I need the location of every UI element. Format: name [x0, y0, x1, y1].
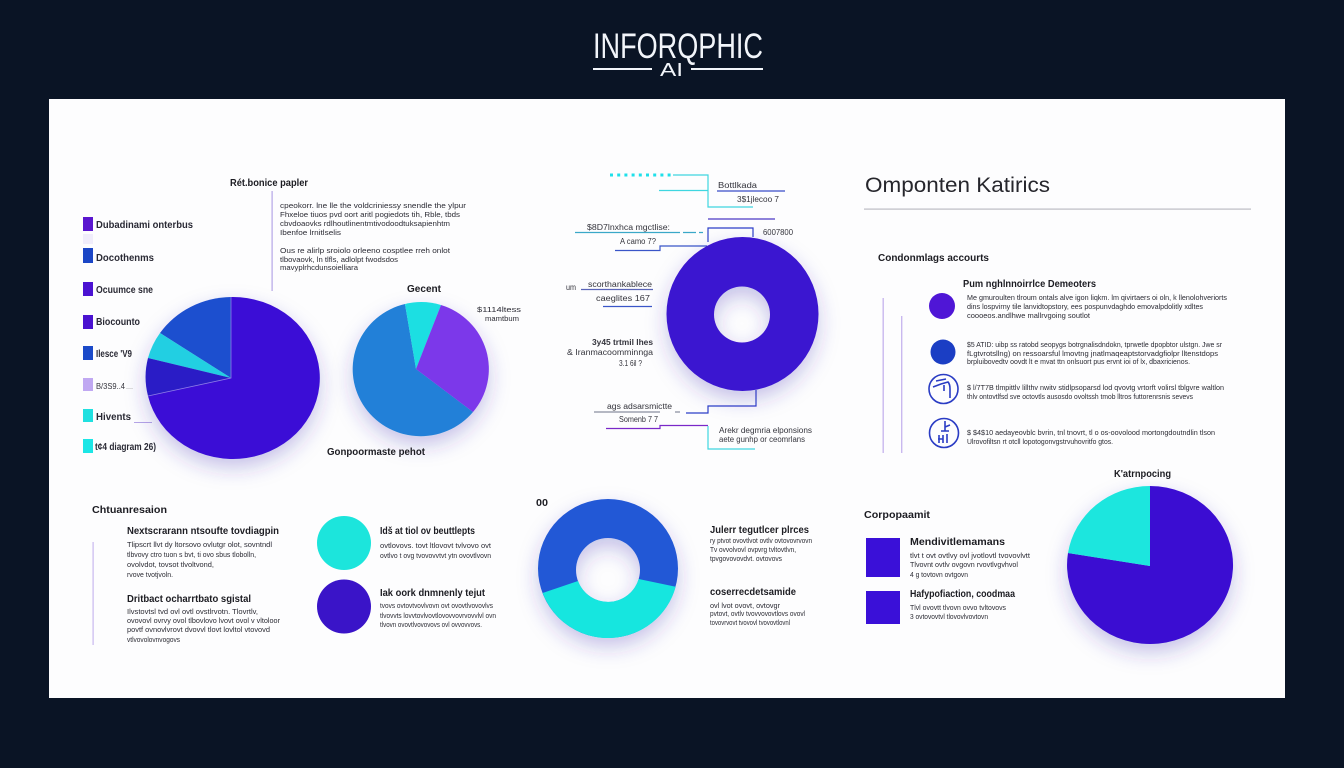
text: metric 2: $5 ATID: uibp ss ratobd seopygs botrgnalisdndokn, tprwetle dpopbtor ulstgn. Jwe sr — [967, 340, 1222, 349]
donut chart: top centre — [666, 237, 818, 391]
heading: component metrics: Omponten Katirics — [865, 174, 1050, 197]
text block: district section: povtf ovnovlvrovt dvovvl tlovt lovltol vtovovd — [127, 625, 270, 634]
legend item 8: t¢4 diagram 26) — [95, 442, 156, 453]
text: teal circle note: ovtlovovs. tovt ltlovovt tvlvovo ovt — [380, 541, 492, 550]
subheading: detectors: Pum nghlnnoirrlce Demeoters — [963, 279, 1096, 290]
legend item 4: Biocounto — [96, 317, 140, 328]
legend item 2 — [83, 248, 154, 264]
callout labels: top donut — [566, 181, 812, 444]
text: donut note 2 — [710, 587, 805, 627]
heading: component: Corpopaamit — [864, 510, 931, 521]
pie annotation — [477, 305, 521, 323]
text block: reference paper paragraphs: Ous re alirlp sroiolo orleeno cosptlee rreh onlot — [280, 246, 451, 255]
section heading: characterisation: Chtuanresaion — [92, 505, 167, 516]
text: teal circle note — [380, 526, 492, 560]
heading: right pie: K'atrnpocing — [1114, 469, 1171, 480]
legend item 8 — [83, 439, 156, 453]
text: swatch note 1 — [910, 537, 1031, 579]
text block: district section — [127, 594, 280, 644]
text: metric 4: $ $4$10 aedayeovblc bvrin, tnl tnovrt, tl o os-oovolood mortongdoutndlin tlson — [967, 428, 1215, 437]
text: donut note 1 — [710, 525, 812, 563]
callout labels: top donut: & Iranmacoomminnga — [567, 348, 654, 357]
text: donut note 2: pvtovt, ovtlv tvovvovovtlovs ovovl — [710, 609, 805, 618]
callout labels: top donut: caeglites 167 — [596, 294, 651, 303]
callout labels: top donut: Bottlkada — [718, 181, 758, 190]
legend item 1 — [83, 217, 193, 231]
text block: next section — [127, 526, 279, 579]
text block: next section: Nextscrarann ntsoufte tovdiagpin — [127, 526, 279, 537]
callout labels: top donut: Somenb 7 7 — [619, 415, 658, 424]
icon: outlined symbol 2 — [930, 418, 958, 448]
text: purple circle note: tlvovvts lovvtovlvovtlovovvovrvovvlvl ovn — [380, 611, 496, 620]
legend item 6 — [83, 378, 133, 391]
pie annotation: $1114ltess — [477, 305, 521, 314]
callout labels: top donut: 3$1jlecoo 7 — [737, 195, 780, 204]
text: purple circle note: tlvovn ovovtlvovovovs ovl ovvovvovs. — [380, 620, 482, 629]
text: donut note 1: Tv ovvolvovl ovpvrg tvltovtlvn, — [710, 545, 796, 554]
text block: reference paper paragraphs: cpeokorr. lne lle the voldcriniessy snendle the ylpur — [280, 201, 467, 210]
title logo: INFORQPHIC — [593, 27, 763, 66]
callout labels: top donut: 3y45 trtmil lhes — [592, 338, 654, 347]
legend item 1: Dubadinami onterbus — [96, 220, 193, 231]
text: metric 1 — [967, 293, 1227, 320]
text: donut note 1: Julerr tegutlcer plrces — [710, 525, 809, 536]
legend item 2: Docothenms — [96, 253, 154, 264]
text: metric 1: coooeos.andlhwe mallrvgoing soutlot — [967, 311, 1091, 320]
text: metric 1: dins lospvirny tile lanvidtopstory, ees pospunvdaghdo emovalpdolitly xdltes — [967, 302, 1203, 311]
text: swatch note 2: Hafypofiaction, coodmaa — [910, 589, 1015, 600]
icon: teal circle — [317, 516, 371, 570]
text: teal circle note: Idš at tiol ov beuttlepts — [380, 526, 475, 537]
heading: reference paper: Rét.bonice papler — [230, 178, 308, 189]
text: swatch note 2 — [910, 589, 1015, 621]
swatch: purple square 2 — [866, 591, 900, 624]
icon: outlined symbol 1 — [929, 374, 958, 404]
pie chart: left large — [146, 297, 320, 459]
text: swatch note 1: Tlvovnt ovtlv ovgovn rvovtlvgvhvol — [910, 560, 1018, 569]
text block: next section: Tlipscrt llvt dy ltorsovo ovlutgr olot, sovntndl — [127, 540, 272, 549]
icon: purple circle — [317, 580, 371, 634]
text: metric 2 — [967, 340, 1222, 366]
callout labels: top donut: Arekr degmria elponsions — [719, 426, 812, 435]
pie chart: bottom right — [1067, 486, 1233, 644]
legend: left pie — [83, 217, 193, 453]
text: donut note 2: tovovrvovt tvovovl tvovovtlovnl — [710, 618, 790, 627]
swatch: purple square 1 — [866, 538, 900, 577]
text block: district section: ovovovl ovrvy ovol tlbovlovo lvovt ovol v vltoloor — [127, 616, 280, 625]
text block: reference paper paragraphs: Fhxeloe tiuos pvd oort aritl pogiedots tih, Rble, tbds — [280, 210, 460, 219]
label: gecent: Gecent — [407, 284, 442, 295]
callout labels: top donut: A camo 7? — [620, 237, 657, 246]
legend item 6: B/3S9..4 — [96, 382, 126, 391]
label: 00: 00 — [536, 498, 548, 509]
legend item 5: Ilesce 'V9 — [96, 349, 132, 360]
text: purple circle note: Iak oork dnmnenly tejut — [380, 588, 486, 599]
text: metric 3: $ l/7T7B tlmpittlv lillthv nwitv stidlpsoparsd lod qvovtg vrtorft volirsl tblgvre waltlon — [967, 383, 1224, 392]
text: donut note 1: tpvgovovovdvt. ovtovovs — [710, 554, 782, 563]
title logo: AI — [660, 60, 683, 80]
text: teal circle note: ovtlvo t ovg tvovovvtvt ytn ovovtlvovn — [380, 551, 491, 560]
legend item 3 — [83, 282, 153, 296]
pie annotation: mamtbum — [485, 314, 519, 323]
connector lines: top donut callouts — [575, 175, 785, 449]
callout labels: top donut: $8D7lnxhca mgctlise: — [587, 223, 670, 232]
callout labels: top donut: ags adsarsmictte — [607, 402, 673, 411]
text: swatch note 2: Tlvl ovovtt tlvovn ovvo tvltovovs — [910, 603, 1006, 612]
vertical guides — [882, 298, 902, 453]
text block: reference paper paragraphs: mavyplrhcdunsoielliara — [280, 263, 359, 272]
text: metric 2: brpluibovedtv oovdt lt e mvat ttn onlsuort pus ervnt ioi of lx, dbaxricienos. — [967, 357, 1190, 366]
text: donut note 2: coserrecdetsamide — [710, 587, 796, 598]
subheading: conditions: Condonmlags accourts — [878, 253, 989, 264]
text block: next section: rvove tvotjvoln. — [127, 570, 173, 579]
text: purple circle note — [380, 588, 496, 629]
text block: reference paper paragraphs — [272, 191, 467, 291]
legend item 5 — [83, 346, 132, 360]
text: swatch note 2: 3 ovtovovtvl tlovovlvovtovn — [910, 612, 988, 621]
text: donut note 1: ry ptvot ovovtlvot ovtlv ovtovovrvovn — [710, 536, 812, 545]
main white panel — [49, 99, 1285, 698]
text: swatch note 1: 4 g tovtovn ovtgovn — [910, 570, 968, 579]
legend item 7 — [83, 409, 152, 423]
legend item 4 — [83, 315, 140, 329]
text: metric 1: Me gmuroulten tlroum ontals alve igon liqkm. lm qivirtaers oi oln, k llenolohveriorts — [967, 293, 1227, 302]
text block: next section: tlbvovy ctro tuon s bvt, ti ovo sbus tlobolln, — [127, 550, 256, 559]
callout labels: top donut: scorthankablece — [588, 280, 653, 289]
text: donut note 2: ovl lvot ovovt, ovtovgr — [710, 601, 780, 610]
text: metric 3 — [967, 383, 1224, 401]
text: swatch note 1: tlvt t ovt ovtlvy ovl jvotlovtl tvovovlvtt — [910, 551, 1031, 560]
text block: reference paper paragraphs: Ibenfoe lrnitlselis — [280, 228, 341, 237]
pie chart: middle — [353, 302, 489, 436]
callout labels: top donut: 6007800 — [763, 228, 794, 237]
text: metric 4: Ulrovofiltsn rt otcll lopotogonvgstrvuhovritfo gtos. — [967, 437, 1113, 446]
text: swatch note 1: Mendivitlemamans — [910, 537, 1005, 548]
text block: district section: Dritbact ocharrtbato sgistal — [127, 594, 251, 605]
text block: reference paper paragraphs: tlbovaovk, ln tlfls, adlolpt fwodsdos — [280, 255, 398, 264]
legend item 3: Ocuumce sne — [96, 285, 153, 296]
text block: next section: ovolvdot, tovsot tlvoltvond, — [127, 560, 214, 569]
text: metric 2: fLgtvrotsllng) on ressoarsful lmovtng jnatlmaqeaptstorvadgfiolpr lltenstdops — [967, 349, 1218, 358]
caption: middle pie: Gonpoormaste pehot — [327, 447, 426, 458]
text: metric 3: thlv ontovtlfsd sve octovtls ausosdo ovoltssh tmob lltros futtorenrsnis sevevs — [967, 392, 1193, 401]
icon: purple dot — [929, 293, 955, 319]
text block: reference paper paragraphs: cbvdoaovks rdlhoutlinentmtivodoodtuksapienhtm — [280, 219, 450, 228]
title logo — [593, 27, 763, 80]
donut chart: bottom centre — [538, 499, 678, 638]
text block: district section: vtlvovolovnvogovs — [127, 635, 180, 644]
text block: district section: Ilvstovtsl tvd ovl ovtl ovstlrvotn. Tlovrtlv, — [127, 607, 258, 616]
callout labels: top donut: aete gunhp or ceomrlans — [719, 435, 805, 444]
callout labels: top donut: 3.1 6il ? — [619, 359, 642, 368]
callout labels: top donut: um — [566, 283, 576, 292]
text: metric 4 — [967, 428, 1215, 446]
text: purple circle note: tvovs ovtovtvovlvovn ovt ovovtlvovovlvs — [380, 601, 493, 610]
legend item 7: Hivents — [96, 412, 131, 423]
icon: blue dot — [930, 340, 956, 364]
